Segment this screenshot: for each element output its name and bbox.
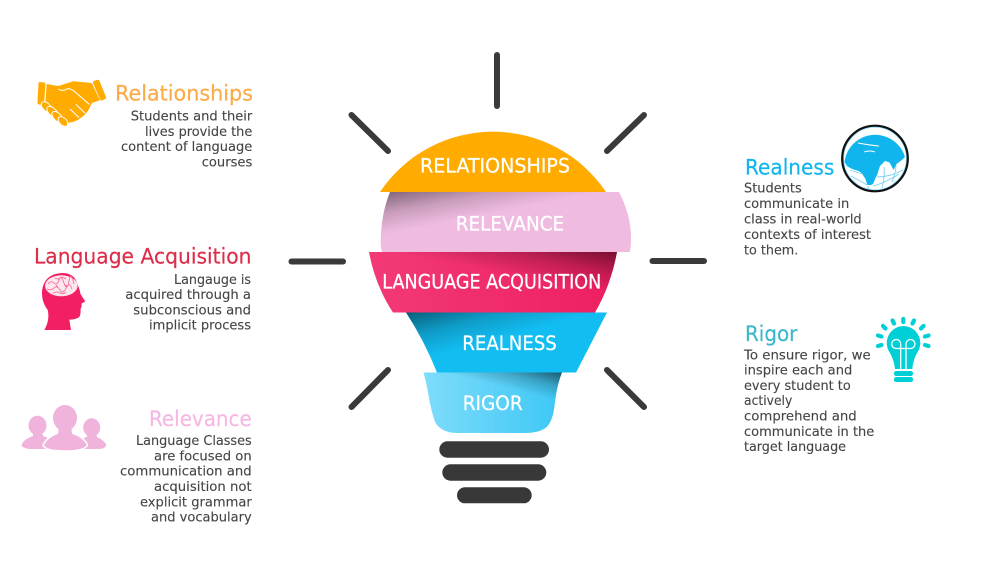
icon: handshake [38,80,106,128]
text: relevance description: and vocabulary [151,510,252,526]
band: rigor: RIGOR [463,392,523,415]
panel: realness [744,126,908,258]
band: language acquisition: LANGUAGE ACQUISITION [382,271,601,294]
text: relevance description: Language Classes [136,433,252,449]
panel: rigor [743,319,928,455]
text: language acquisition description: Langauge is [174,272,251,288]
band: relationships: RELATIONSHIPS [420,155,570,178]
band: realness: REALNESS [462,332,557,355]
text: language acquisition description [125,272,251,334]
bulb base [439,441,549,503]
text: relevance description: acquisition not [154,479,252,495]
icon: group of people [22,405,106,451]
text: realness description: contexts of interest [744,227,871,243]
text: relationships description: courses [202,154,252,170]
text: rigor description: every student to [744,378,851,394]
text: relevance description: are focused on [154,448,252,464]
text: realness description: communicate in [744,196,849,212]
panel: language acquisition [34,244,252,334]
text: relationships description: content of language [121,139,252,155]
text: rigor description: actively [744,393,792,409]
heading: language acquisition: Language Acquisition [34,244,252,268]
text: relationships description: lives provide the [145,124,252,140]
lightbulb rays [292,55,704,407]
band: relationships [380,132,606,192]
text: realness description: class in real-world [744,212,862,228]
text: rigor description: To ensure rigor, we [743,347,871,363]
heading: relevance: Relevance [149,407,252,431]
text: realness description [744,181,871,258]
text: relevance description [120,433,252,526]
text: relevance description: communication and [120,464,252,480]
heading: rigor: Rigor [745,322,798,346]
text: relationships description: Students and their [131,109,253,125]
text: rigor description: communicate in the [744,424,874,440]
text: rigor description [743,347,874,455]
icon: idea bulb [878,319,928,382]
text: realness description: Students [744,181,802,197]
panel: relationships [38,80,253,170]
icon: globe [842,126,908,191]
band: rigor [424,372,562,433]
text: language acquisition description: subconscious and [133,302,251,318]
text: rigor description: target language [744,439,846,455]
band: relevance: RELEVANCE [456,213,564,236]
text: relevance description: explicit grammar [140,494,252,510]
icon: head with brain [42,273,85,330]
text: language acquisition description: implicit process [149,318,251,334]
band: language acquisition [369,252,617,312]
heading: relationships: Relationships [115,82,253,106]
text: language acquisition description: acquired through a [125,287,251,303]
text: realness description: to them. [744,242,798,258]
text: rigor description: inspire each and [744,363,852,379]
band: relevance [381,192,631,252]
text: rigor description: comprehend and [744,409,857,425]
text: relationships description [121,109,253,170]
panel: relevance [22,405,252,526]
heading: realness: Realness [745,156,834,180]
central lightbulb [369,132,631,503]
band: realness [406,312,607,372]
